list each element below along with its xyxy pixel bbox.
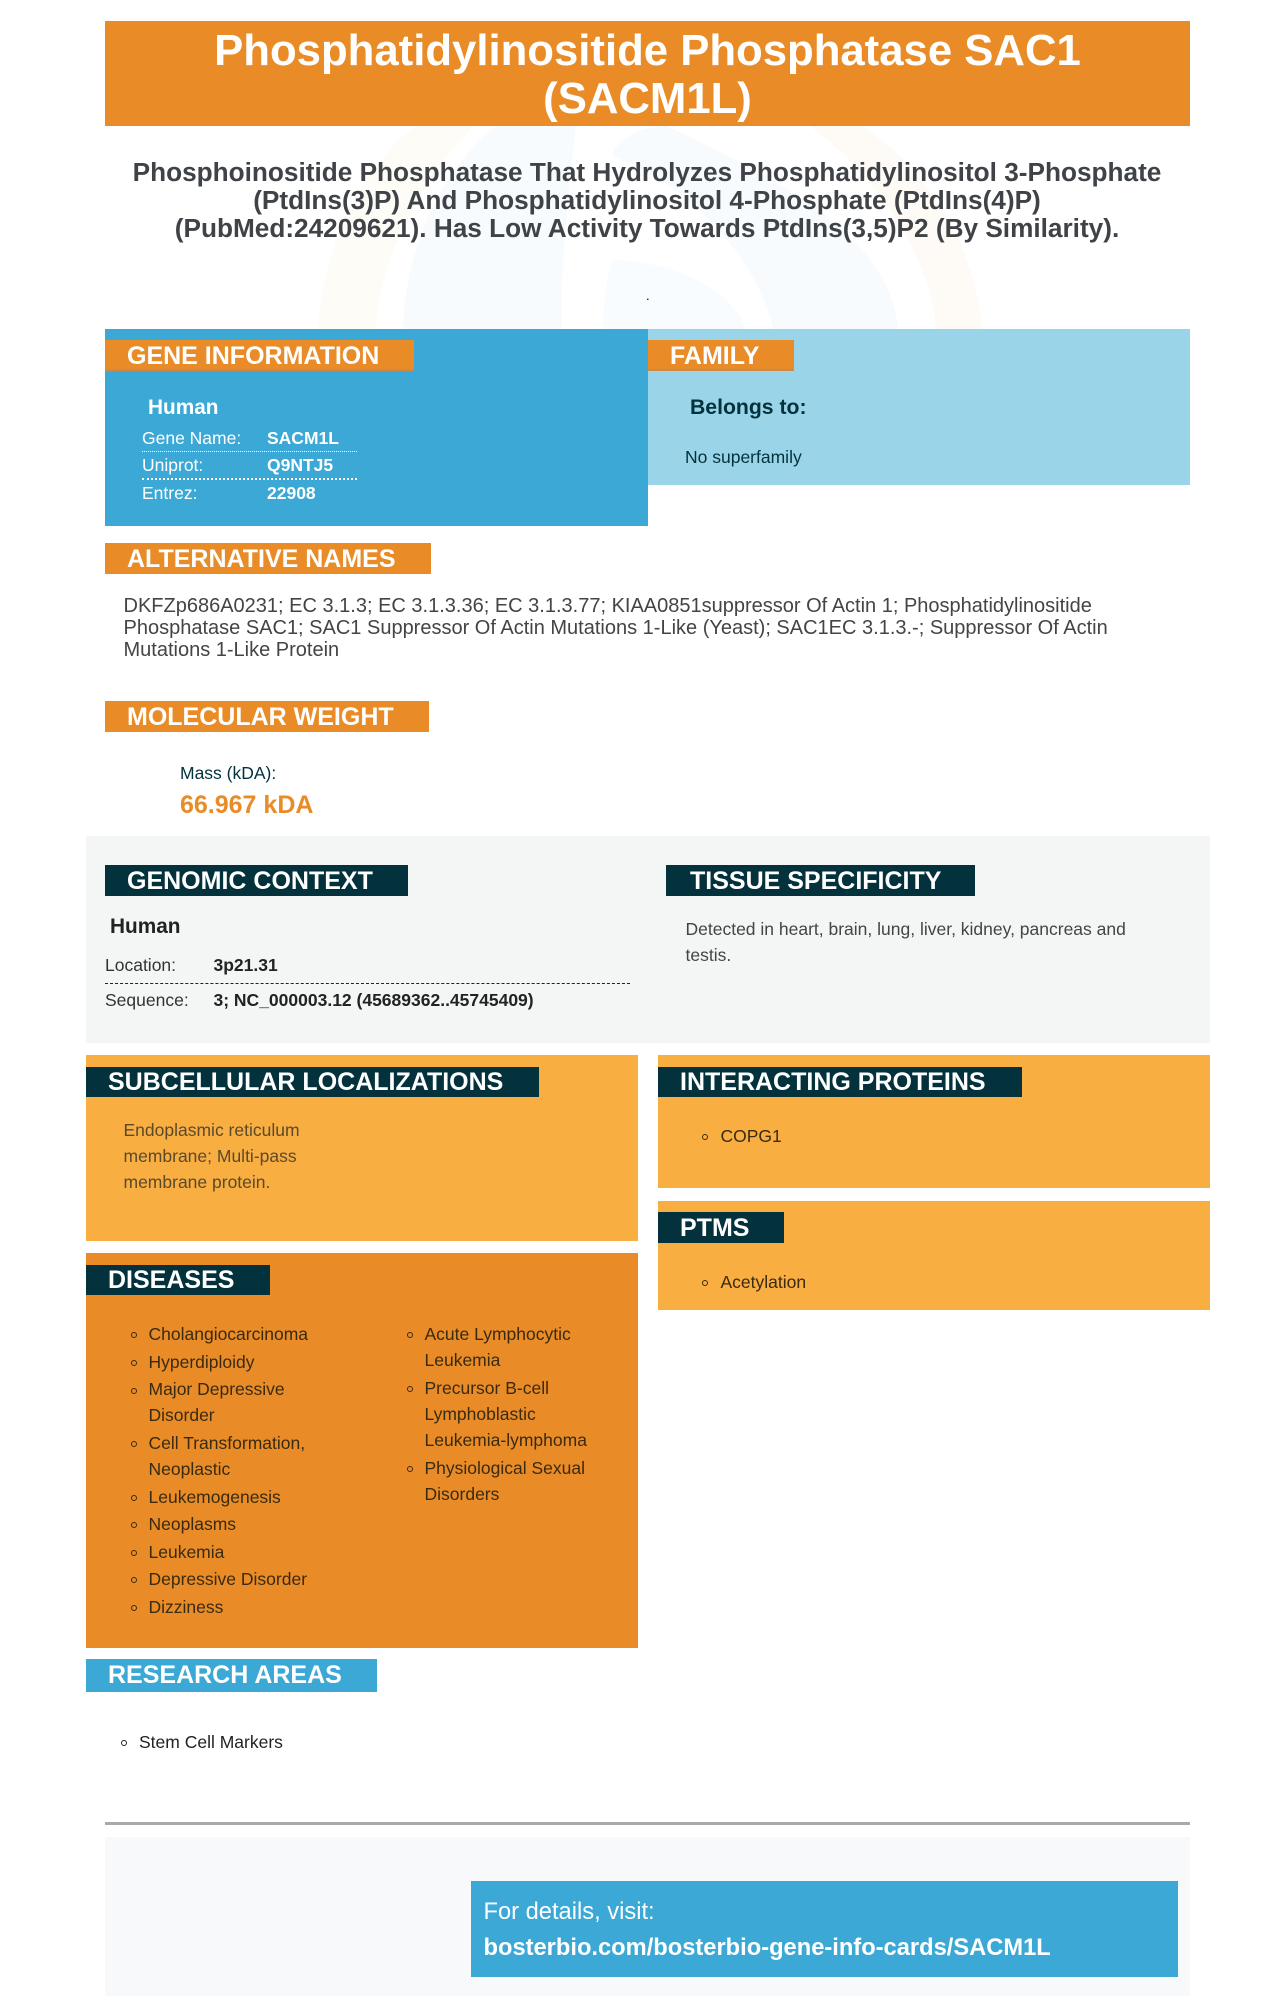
- tissue text: [686, 919, 1126, 965]
- title banner: Phosphatidylinositide Phosphatase SAC1: [214, 26, 1081, 75]
- tissue text: Detected in heart, brain, lung, liver, kidney, pancreas and: [686, 919, 1126, 939]
- gene table: [142, 428, 357, 502]
- subtitle: Phosphoinositide Phosphatase That Hydrolyzes Phosphatidylinositol 3-Phosphate: [133, 157, 1161, 187]
- heading: subcellular localizations: SUBCELLULAR LOCALIZATIONS: [108, 1068, 503, 1096]
- heading: genomic context: GENOMIC CONTEXT: [127, 867, 373, 895]
- disease list column 1: [131, 1324, 308, 1617]
- gene table: Uniprot:: [142, 454, 203, 474]
- disease list column 1: Dizziness: [148, 1597, 223, 1617]
- family value: No superfamily: [685, 446, 802, 466]
- gene table: SACM1L: [267, 428, 339, 448]
- disease list column 1: Depressive Disorder: [148, 1569, 307, 1589]
- mass value: 66.967 kDA: [180, 791, 313, 819]
- heading: interacting proteins: INTERACTING PROTEINS: [680, 1068, 986, 1096]
- panel: diseases: [86, 1253, 638, 1648]
- tissue text: testis.: [686, 945, 731, 965]
- gene table: 22908: [267, 482, 316, 502]
- location row: 3p21.31: [214, 955, 278, 975]
- gene table: Entrez:: [142, 482, 197, 502]
- disease list column 2: Lymphoblastic: [424, 1404, 536, 1424]
- heading: molecular weight: MOLECULAR WEIGHT: [127, 703, 394, 731]
- disease list column 2: Precursor B-cell: [424, 1378, 549, 1398]
- sequence row: Sequence:: [105, 990, 189, 1010]
- alternative names text: DKFZp686A0231; EC 3.1.3; EC 3.1.3.36; EC 3.1.3.77; KIAA0851suppressor Of Actin 1; Phosphatidylinositide: [124, 594, 1092, 616]
- heading: ptms: [658, 1212, 784, 1243]
- alternative names text: Phosphatase SAC1; SAC1 Suppressor Of Actin Mutations 1-Like (Yeast); SAC1EC 3.1.3.-; Suppressor Of Actin: [124, 616, 1108, 638]
- panel: ptms: [658, 1201, 1210, 1310]
- gene table: Q9NTJ5: [267, 454, 333, 474]
- disease list column 1: Cholangiocarcinoma: [148, 1324, 308, 1344]
- heading: research areas: RESEARCH AREAS: [108, 1661, 342, 1689]
- disease list column 1: Neoplasms: [148, 1514, 236, 1534]
- disease list column 2: Acute Lymphocytic: [424, 1324, 571, 1344]
- alternative names text: [124, 594, 1108, 660]
- divider rule: [105, 1822, 1190, 1825]
- mass label: Mass (kDA):: [180, 762, 276, 782]
- localization text: Endoplasmic reticulum: [124, 1120, 300, 1140]
- heading: diseases: DISEASES: [108, 1266, 234, 1294]
- species label: Human: [148, 396, 218, 419]
- location row: Location:: [105, 955, 176, 975]
- dot: .: [646, 288, 650, 303]
- localization text: membrane; Multi-pass: [124, 1146, 297, 1166]
- disease list column 2: Leukemia-lymphoma: [424, 1430, 587, 1450]
- heading: alternative names: ALTERNATIVE NAMES: [127, 545, 396, 573]
- heading: ptms: PTMS: [680, 1214, 749, 1242]
- disease list column 1: Leukemogenesis: [148, 1487, 281, 1507]
- ptm list: Acetylation: [720, 1272, 806, 1292]
- disease list column 2: Disorders: [424, 1484, 499, 1504]
- heading: gene information: GENE INFORMATION: [127, 342, 379, 370]
- title banner: (SACM1L): [543, 74, 752, 123]
- background watermark logo: [810, 126, 982, 329]
- species label: Human: [110, 914, 180, 938]
- gene table: Gene Name:: [142, 428, 241, 448]
- subtitle: (PtdIns(3)P) And Phosphatidylinositol 4-Phosphate (PtdIns(4)P): [253, 185, 1041, 215]
- disease list column 1: Hyperdiploidy: [148, 1352, 255, 1372]
- callout: details link: [471, 1881, 1178, 1977]
- localization text: membrane protein.: [124, 1172, 270, 1192]
- disease list column 1: Major Depressive: [148, 1379, 285, 1399]
- callout url: bosterbio.com/bosterbio-gene-info-cards/SACM1L: [484, 1934, 1051, 1960]
- heading: research areas: [86, 1659, 377, 1692]
- protein list: COPG1: [720, 1126, 782, 1146]
- panel: interacting proteins: [658, 1055, 1210, 1188]
- panel: gene information: [105, 329, 648, 526]
- heading: family: FAMILY: [670, 342, 759, 370]
- panel: footer: [105, 1837, 1190, 1996]
- disease list column 1: Neoplastic: [148, 1459, 230, 1479]
- subtitle: [133, 157, 1161, 243]
- disease list column 2: Physiological Sexual: [424, 1458, 585, 1478]
- panel: family: [648, 329, 1190, 485]
- panel: subcellular localizations: [86, 1055, 638, 1241]
- disease list column 2: Leukemia: [424, 1350, 500, 1370]
- disease list column 1: Disorder: [148, 1405, 215, 1425]
- heading: tissue specificity: TISSUE SPECIFICITY: [690, 867, 941, 895]
- location row: [105, 955, 278, 975]
- heading: family: [648, 340, 794, 371]
- localization text: [124, 1120, 300, 1192]
- belongs to label: Belongs to:: [690, 396, 807, 419]
- callout label: For details, visit:: [484, 1899, 655, 1925]
- heading: diseases: [86, 1265, 270, 1295]
- subtitle: (PubMed:24209621). Has Low Activity Towards PtdIns(3,5)P2 (By Similarity).: [175, 213, 1119, 243]
- disease list column 1: Leukemia: [148, 1542, 224, 1562]
- disease list column 2: [407, 1324, 587, 1504]
- sequence row: 3; NC_000003.12 (45689362..45745409): [214, 990, 534, 1010]
- disease list column 1: Cell Transformation,: [148, 1433, 305, 1453]
- panel: genomic context and tissue: [86, 836, 1210, 1043]
- sequence row: [105, 983, 630, 1018]
- research areas list: Stem Cell Markers: [139, 1732, 283, 1752]
- alternative names text: Mutations 1-Like Protein: [124, 638, 339, 660]
- title banner: [104, 21, 1190, 126]
